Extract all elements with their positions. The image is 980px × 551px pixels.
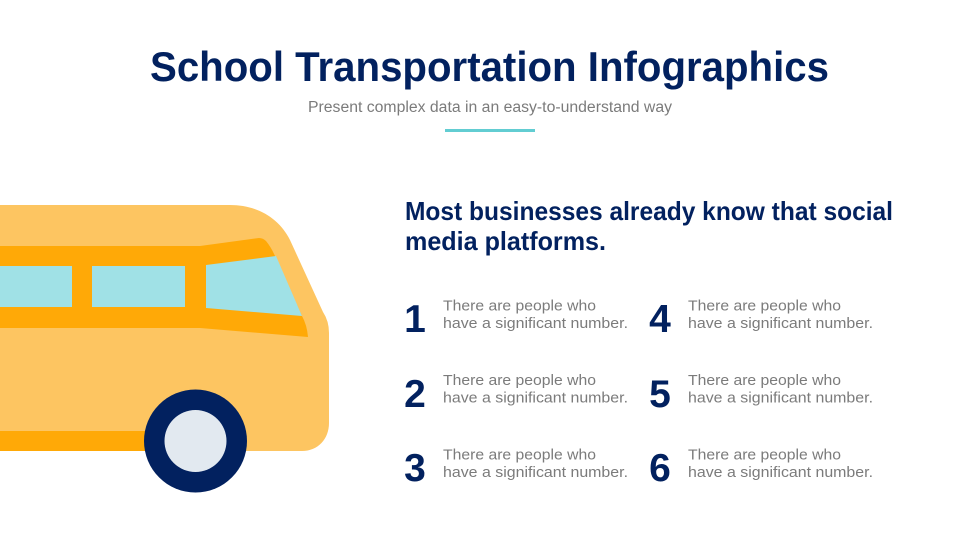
item 3: There are people who — [443, 446, 596, 464]
item 6 — [649, 446, 873, 490]
side window 2 — [92, 266, 185, 307]
item 2: have a significant number. — [443, 390, 628, 406]
side window 1 — [0, 266, 72, 307]
bus body — [0, 205, 329, 451]
item 1: There are people who — [443, 298, 596, 314]
heading: Most businesses already know that social — [405, 196, 893, 226]
item 5: There are people who — [688, 372, 841, 389]
item 1: have a significant number. — [443, 315, 628, 332]
item 6: 6 — [649, 447, 671, 490]
item 2 — [404, 372, 628, 416]
item 3: have a significant number. — [443, 464, 628, 481]
wheel — [144, 390, 247, 492]
title: School Transportation Infographics — [150, 43, 829, 90]
item 5 — [649, 372, 873, 416]
window frame band — [0, 238, 308, 337]
item 6: have a significant number. — [688, 464, 873, 481]
item 3 — [404, 446, 628, 490]
item 2: There are people who — [443, 372, 596, 389]
item 5: have a significant number. — [688, 390, 873, 406]
item 3: 3 — [404, 447, 426, 490]
item 4: 4 — [649, 298, 671, 341]
item 1 — [404, 298, 628, 341]
item 5: 5 — [649, 373, 671, 416]
bottom stripe — [0, 431, 160, 451]
item 4: have a significant number. — [688, 315, 873, 332]
item 1: 1 — [404, 298, 426, 341]
subtitle: Present complex data in an easy-to-understand way — [308, 99, 672, 116]
heading — [405, 196, 893, 256]
windshield — [206, 256, 302, 316]
item 4: There are people who — [688, 298, 841, 314]
illustration: school bus — [0, 205, 329, 492]
title accent line — [445, 129, 535, 132]
item 2: 2 — [404, 373, 426, 416]
item 6: There are people who — [688, 446, 841, 464]
item 4 — [649, 298, 873, 341]
heading: media platforms. — [405, 226, 606, 256]
